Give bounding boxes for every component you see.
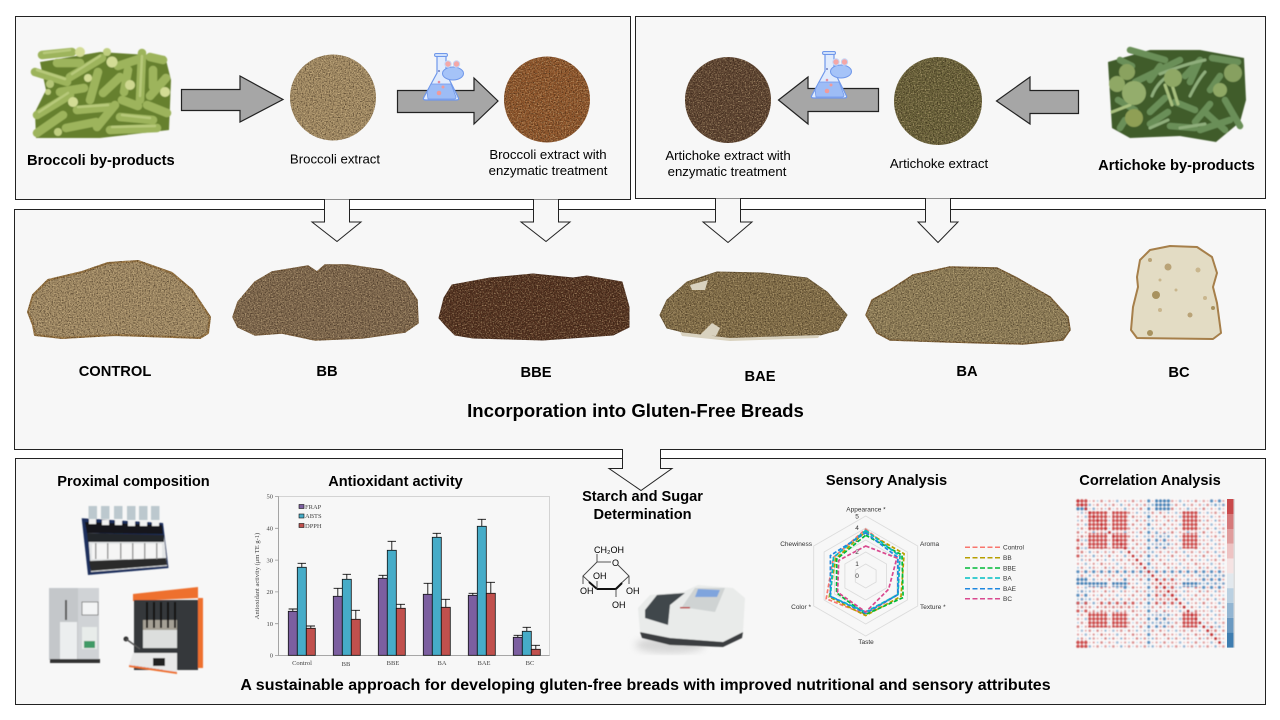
radar axis labels: 2 xyxy=(855,549,859,556)
panel: broccoli by-products xyxy=(16,16,630,200)
radar legend: Control xyxy=(1003,544,1025,552)
radar axis labels: Color * xyxy=(791,604,811,611)
icon: glucose structure: OH xyxy=(626,586,640,596)
y axis ticks: 50 xyxy=(266,494,273,500)
y axis ticks: 10 xyxy=(266,621,273,628)
label: broccoli by-products: Broccoli by-products xyxy=(27,153,175,169)
radar axis labels xyxy=(780,506,946,646)
legend: FRAP xyxy=(305,504,322,511)
ABTS bars xyxy=(297,526,531,655)
icon: fibre extractor xyxy=(124,587,203,674)
label: BC: BC xyxy=(1168,365,1190,381)
y axis label: Antioxidant activity (μm TE g-1) xyxy=(254,533,261,619)
radar axis labels: Aroma xyxy=(920,541,940,548)
radar legend xyxy=(965,544,1025,603)
icon: glucose structure: O xyxy=(612,558,619,568)
y axis ticks: 20 xyxy=(266,589,273,596)
image: control bread xyxy=(28,261,210,338)
x axis labels: BA xyxy=(437,660,447,667)
radar grid xyxy=(814,516,918,636)
radar axis labels: Chewiness xyxy=(780,541,813,548)
legend: DPPH xyxy=(305,523,322,530)
heading: starch and sugar determination xyxy=(582,489,703,523)
arrow: extract to enzymatic treatment xyxy=(778,77,878,124)
image: BB bread xyxy=(233,265,418,340)
image: artichoke extract powder xyxy=(894,57,982,145)
label: artichoke by-products: Artichoke by-products xyxy=(1098,158,1255,174)
radar axis labels: Taste xyxy=(858,639,874,646)
arrow: by-products to extract xyxy=(182,76,283,122)
FRAP bars xyxy=(288,578,522,655)
label: broccoli extract: Broccoli extract xyxy=(290,152,380,166)
x axis labels: Control xyxy=(292,660,312,667)
image: BA bread xyxy=(866,267,1070,344)
heading: starch and sugar determination: Determination xyxy=(593,507,692,523)
icon: enzymatic flask xyxy=(423,54,464,100)
heading: antioxidant activity: Antioxidant activity xyxy=(328,474,464,490)
panel: incorporation into gluten-free breads xyxy=(14,210,1266,450)
x axis labels: BC xyxy=(526,660,534,667)
radar axis labels: 5 xyxy=(855,514,859,520)
icon: enzymatic flask xyxy=(811,52,852,98)
image: broccoli extract powder xyxy=(290,54,376,140)
icon: spectrophotometer xyxy=(635,585,745,653)
radar axis labels: 0 xyxy=(855,573,859,580)
correlation matrix xyxy=(1076,499,1225,648)
image: BC white bread slice xyxy=(1131,246,1221,339)
y axis ticks: 0 xyxy=(270,652,273,660)
icon: solvent extractor xyxy=(82,506,168,575)
radar legend: BA xyxy=(1003,575,1012,582)
legend: ABTS xyxy=(305,513,322,520)
label: BAE: BAE xyxy=(744,369,776,385)
arrow: extract to enzymatic treatment xyxy=(398,78,498,124)
radar axis labels: Appearance * xyxy=(846,506,886,514)
label: broccoli extract with enzymatic treatment: Broccoli extract with xyxy=(489,147,607,162)
radar axis labels: 4 xyxy=(855,525,859,532)
panel: analyses xyxy=(16,458,1266,704)
x axis labels: BB xyxy=(342,661,351,668)
y axis ticks: 30 xyxy=(266,558,273,564)
radar legend: BB xyxy=(1003,555,1012,562)
label: control: CONTROL xyxy=(79,364,151,380)
arrow: artichoke bread feed 2 xyxy=(918,198,958,242)
radar axis labels: 3 xyxy=(855,537,859,544)
x axis labels: BBE xyxy=(387,660,399,667)
label: enzymatic treatment line: enzymatic treatment xyxy=(489,163,608,178)
image: artichoke extract with enzymatic treatment xyxy=(685,57,771,143)
arrow: broccoli bread feed 1 xyxy=(312,200,361,242)
error bars xyxy=(289,519,540,649)
label: artichoke extract with enzymatic treatment: Artichoke extract with xyxy=(665,148,791,163)
label: BA: BA xyxy=(956,364,978,380)
legend xyxy=(299,504,322,530)
icon: Kjeldahl analyser xyxy=(49,588,100,663)
arrow: by-products to extract xyxy=(996,77,1078,124)
arrow: broccoli bread feed 2 xyxy=(521,200,570,242)
radar legend: BBE xyxy=(1003,565,1017,572)
radar axis labels: Texture * xyxy=(920,604,946,611)
icon: glucose structure: OH xyxy=(593,571,606,581)
heading: proximal composition: Proximal composition xyxy=(57,474,210,490)
bar chart: antioxidant activity xyxy=(254,494,550,668)
y axis ticks: 40 xyxy=(266,526,273,532)
image: broccoli extract with enzymatic treatment xyxy=(504,56,590,142)
y axis ticks xyxy=(266,494,273,660)
label: enzymatic treatment line: enzymatic treatment xyxy=(668,164,787,179)
heading: starch and sugar determination: Starch and Sugar xyxy=(582,489,703,505)
DPPH bars xyxy=(306,593,540,655)
radar legend: BAE xyxy=(1003,586,1017,593)
arrow: artichoke bread feed 1 xyxy=(703,198,752,242)
label: BB: BB xyxy=(316,364,338,380)
radar series xyxy=(826,529,904,616)
arrow: breads to analyses xyxy=(609,449,672,490)
footer conclusion: A sustainable approach for developing gluten-free breads with improved nutritional and sensory attributes xyxy=(240,677,1051,694)
icon: broccoli by-products pile xyxy=(35,47,171,138)
heading: sensory analysis: Sensory Analysis xyxy=(826,473,947,489)
icon: artichoke by-products pile xyxy=(1108,50,1246,142)
label: artichoke extract: Artichoke extract xyxy=(890,156,988,171)
icon: glucose structure: CH₂OH xyxy=(594,545,624,555)
image: BBE bread xyxy=(439,274,629,340)
icon: glucose structure xyxy=(580,545,640,610)
x axis labels: BAE xyxy=(478,660,491,667)
radar axis labels: 1 xyxy=(855,561,859,568)
icon: glucose structure: OH xyxy=(612,600,626,610)
x axis labels xyxy=(292,660,534,668)
correlation colour scale xyxy=(1227,499,1235,648)
label: BBE: BBE xyxy=(520,365,552,381)
image: BAE bread pale patches xyxy=(680,280,820,341)
radar legend: BC xyxy=(1003,596,1012,603)
heading: incorporation: Incorporation into Gluten-Free Breads xyxy=(467,400,804,421)
heading: correlation analysis: Correlation Analysis xyxy=(1079,473,1221,489)
panel: artichoke by-products xyxy=(636,16,1266,198)
image: BAE bread xyxy=(660,272,847,338)
icon: glucose structure: OH xyxy=(580,586,594,596)
radar chart: sensory analysis xyxy=(780,506,1025,646)
